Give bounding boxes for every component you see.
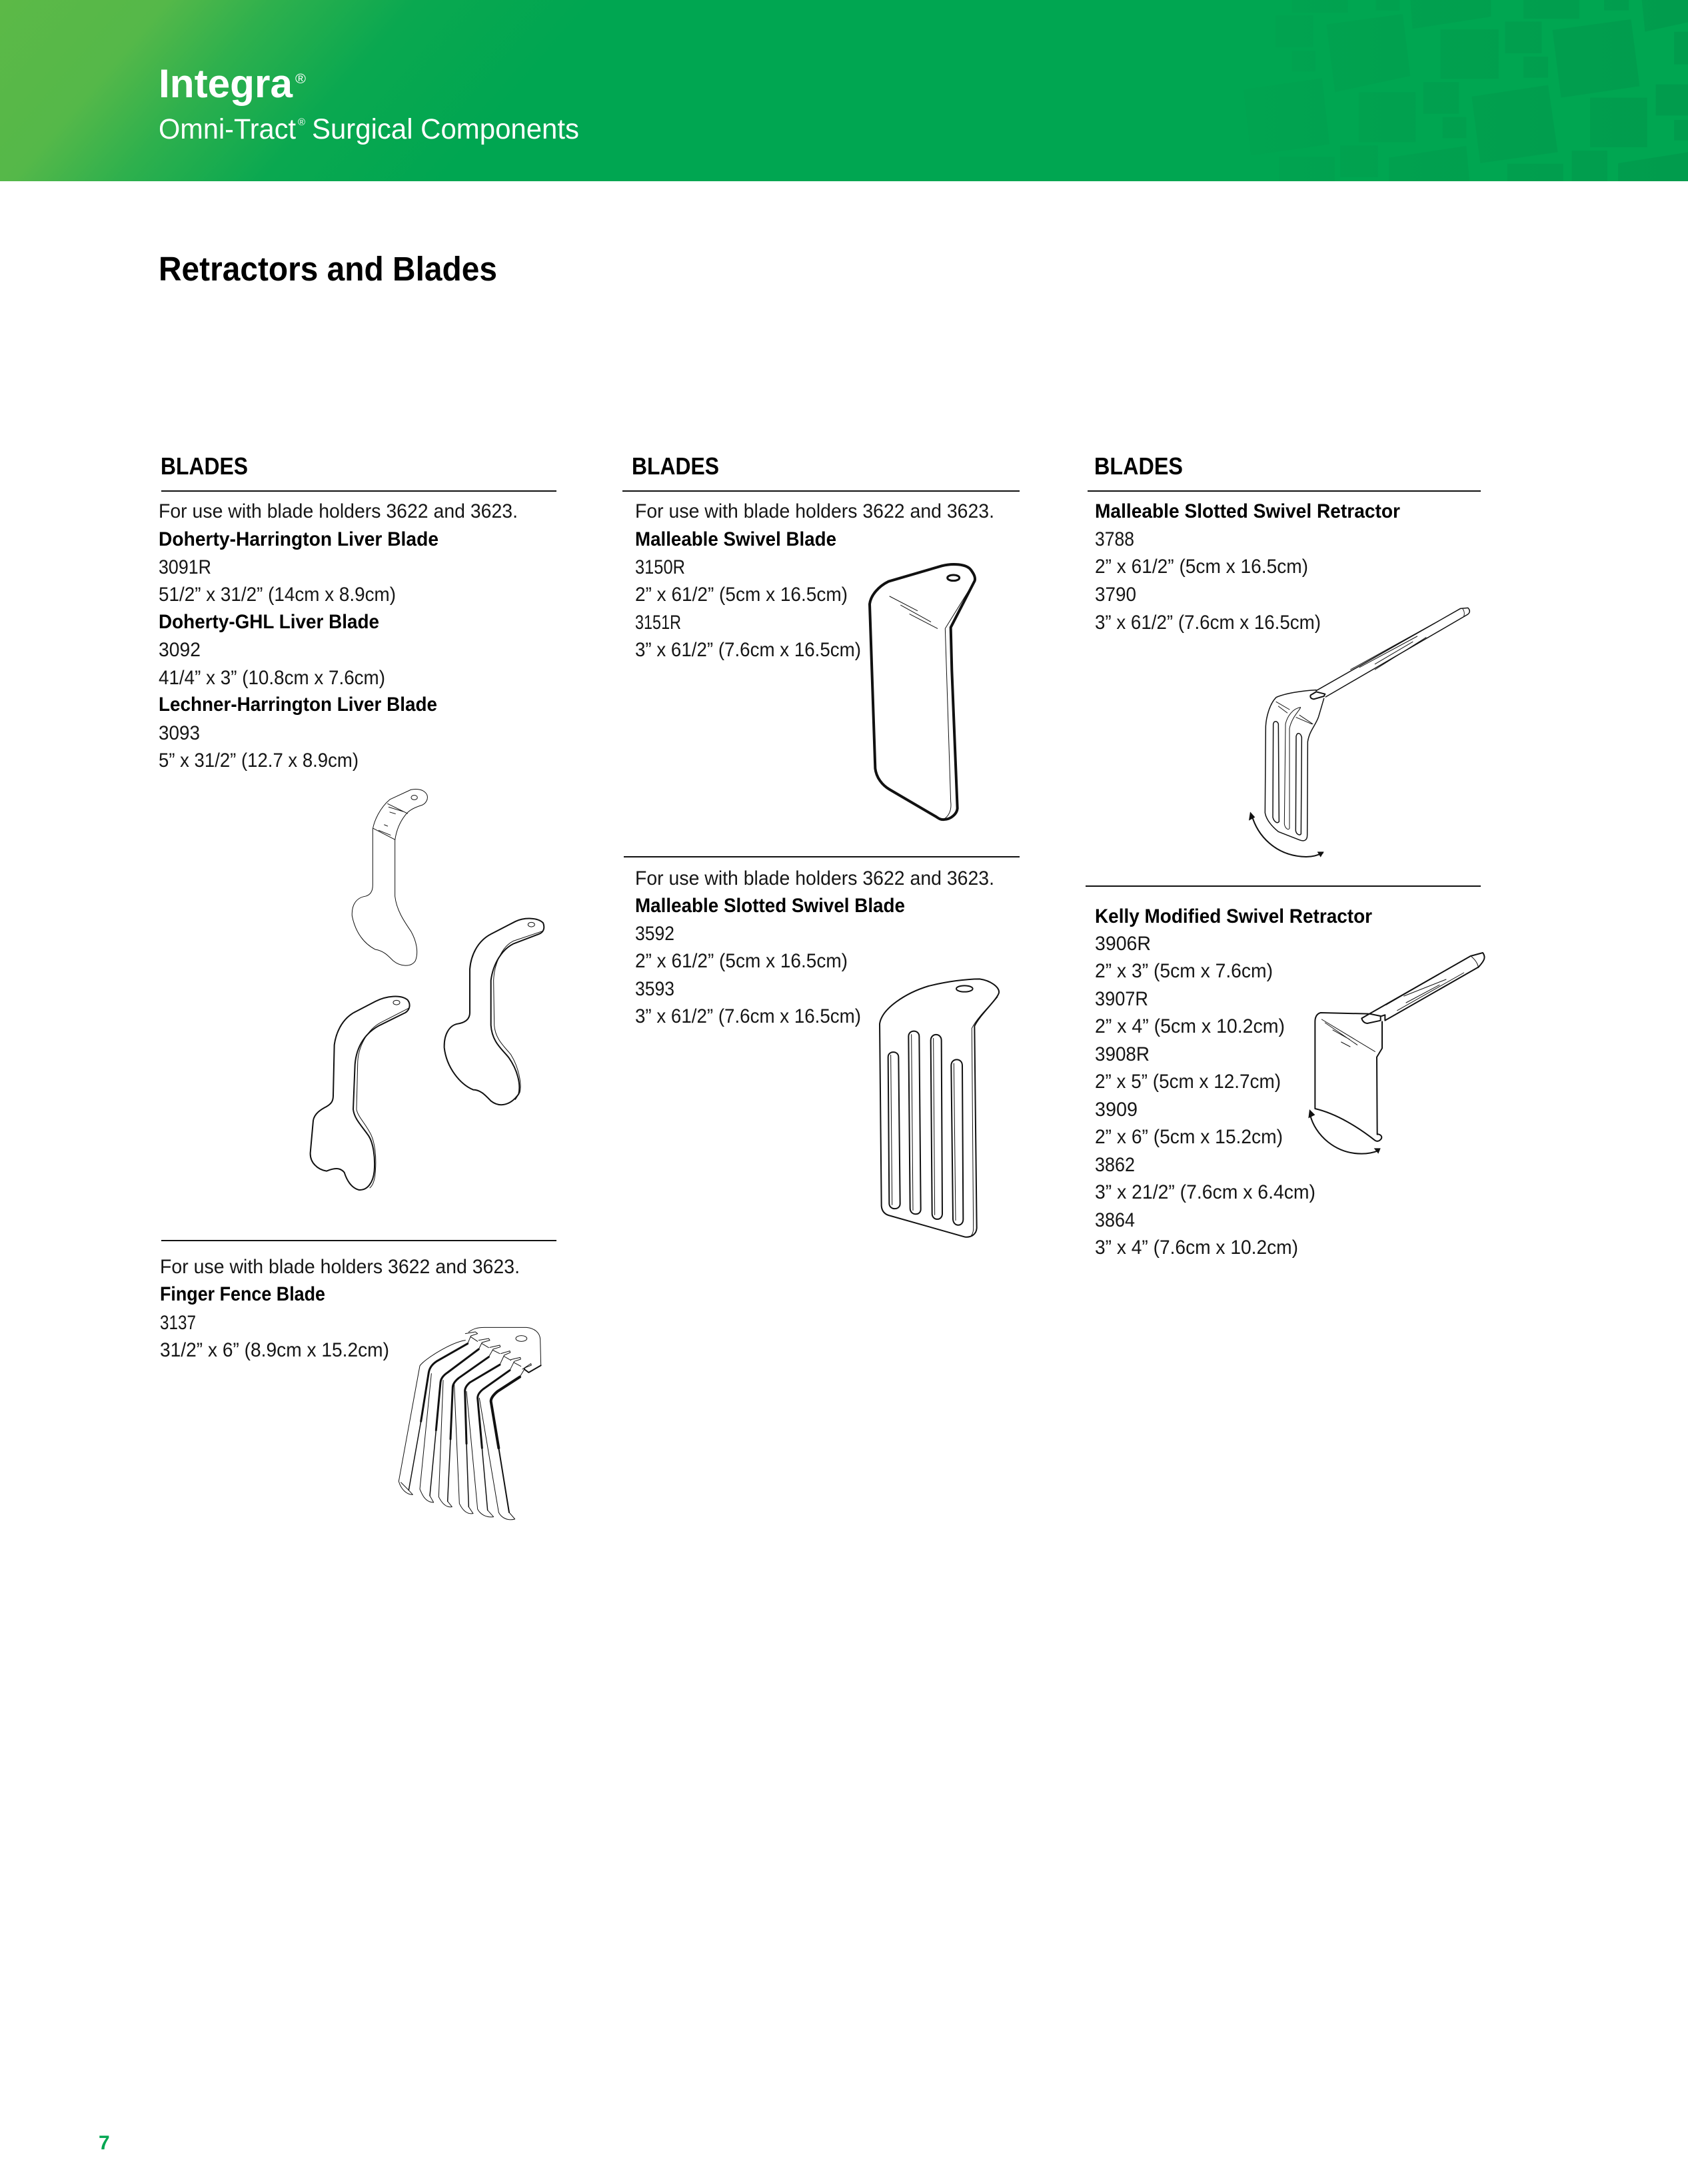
Kelly retractor specifications: 3” x 21/2” (7.6cm x 6.4cm) [1095,1181,1315,1203]
slotted retractor specifications: 2” x 61/2” (5cm x 16.5cm) [1095,556,1308,578]
malleable swivel specifications [635,500,994,661]
slotted retractor specifications [1095,500,1400,634]
illustration: malleable slotted blade [880,979,999,1237]
Kelly retractor specifications: 3909 [1095,1099,1138,1121]
malleable swivel specifications: Malleable Swivel Blade [635,528,836,550]
Kelly retractor specifications: 2” x 4” (5cm x 10.2cm) [1095,1015,1285,1037]
column heading: BLADES [1094,452,1183,480]
subtitle: Surgical Components [312,113,579,145]
brand title: ® [295,72,306,87]
malleable swivel specifications: For use with blade holders 3622 and 3623. [635,500,994,522]
liver blade specifications: 5” x 31/2” (12.7 x 8.9cm) [159,750,359,772]
Kelly retractor specifications: 2” x 6” (5cm x 15.2cm) [1095,1126,1283,1148]
Kelly retractor specifications: 2” x 5” (5cm x 12.7cm) [1095,1071,1281,1093]
slotted retractor specifications: 3790 [1095,584,1136,606]
liver blade specifications: Doherty-Harrington Liver Blade [159,528,438,550]
Kelly retractor specifications: 3908R [1095,1043,1150,1065]
liver blade specifications [159,500,518,772]
illustration: three liver blades [311,789,544,1190]
liver blade specifications: For use with blade holders 3622 and 3623. [159,500,518,522]
liver blade specifications: 3091R [159,556,211,578]
illustration: Kelly swivel retractor [1308,953,1485,1154]
finger fence specifications [160,1256,520,1361]
subtitle: ® [298,117,305,128]
Kelly retractor specifications: 3862 [1095,1154,1135,1176]
malleable slotted specifications: 3592 [635,923,674,945]
illustration: finger fence blade [399,1327,541,1520]
finger fence specifications: 31/2” x 6” (8.9cm x 15.2cm) [160,1339,389,1361]
slotted retractor specifications: 3788 [1095,528,1134,550]
finger fence specifications: 3137 [160,1312,196,1334]
malleable slotted specifications: For use with blade holders 3622 and 3623. [635,867,994,889]
panel: malleable slotted swivel blade [624,856,1020,1237]
malleable swivel specifications: 2” x 61/2” (5cm x 16.5cm) [635,584,848,606]
liver blade specifications: 41/4” x 3” (10.8cm x 7.6cm) [159,667,385,689]
malleable swivel specifications: 3150R [635,556,685,578]
column heading: BLADES [161,452,248,480]
header banner [0,0,1688,181]
liver blade specifications: 3092 [159,639,201,661]
panel: malleable swivel blade [622,452,1020,819]
malleable slotted specifications: Malleable Slotted Swivel Blade [635,895,905,917]
panel: finger fence blade [160,1240,556,1520]
finger fence specifications: Finger Fence Blade [160,1283,325,1305]
slotted retractor specifications: Malleable Slotted Swivel Retractor [1095,500,1400,522]
Kelly retractor specifications [1095,905,1372,1259]
slotted retractor specifications: 3” x 61/2” (7.6cm x 16.5cm) [1095,612,1321,634]
Kelly retractor specifications: 3907R [1095,988,1148,1010]
malleable slotted specifications: 2” x 61/2” (5cm x 16.5cm) [635,950,848,972]
malleable slotted specifications: 3” x 61/2” (7.6cm x 16.5cm) [635,1005,861,1027]
Kelly retractor specifications: Kelly Modified Swivel Retractor [1095,905,1372,927]
malleable slotted specifications [635,867,994,1027]
Kelly retractor specifications: 3” x 4” (7.6cm x 10.2cm) [1095,1237,1298,1259]
Kelly retractor specifications: 3864 [1095,1209,1135,1231]
panel: Kelly modified swivel retractor [1086,885,1485,1259]
panel: liver blades [159,452,556,1190]
illustration: slotted swivel retractor [1249,608,1469,857]
page heading: Retractors and Blades [159,250,497,288]
Kelly retractor specifications: 2” x 3” (5cm x 7.6cm) [1095,960,1273,982]
subtitle [159,113,579,145]
page number: 7 [99,2132,110,2154]
arrow: swivel range [1308,1109,1381,1154]
arrow: swivel range [1249,812,1324,857]
malleable swivel specifications: 3” x 61/2” (7.6cm x 16.5cm) [635,639,861,661]
brand title: Integra [159,61,293,106]
Kelly retractor specifications: 3906R [1095,933,1151,955]
column heading: BLADES [632,452,719,480]
panel: malleable slotted swivel retractor [1088,452,1481,857]
liver blade specifications: 51/2” x 31/2” (14cm x 8.9cm) [159,584,396,606]
malleable swivel specifications: 3151R [635,612,681,634]
malleable slotted specifications: 3593 [635,978,674,1000]
liver blade specifications: Doherty-GHL Liver Blade [159,611,379,633]
liver blade specifications: 3093 [159,722,200,744]
liver blade specifications: Lechner-Harrington Liver Blade [159,694,437,716]
illustration: malleable swivel blade [870,564,975,819]
finger fence specifications: For use with blade holders 3622 and 3623. [160,1256,520,1278]
subtitle: Omni-Tract [159,113,296,145]
